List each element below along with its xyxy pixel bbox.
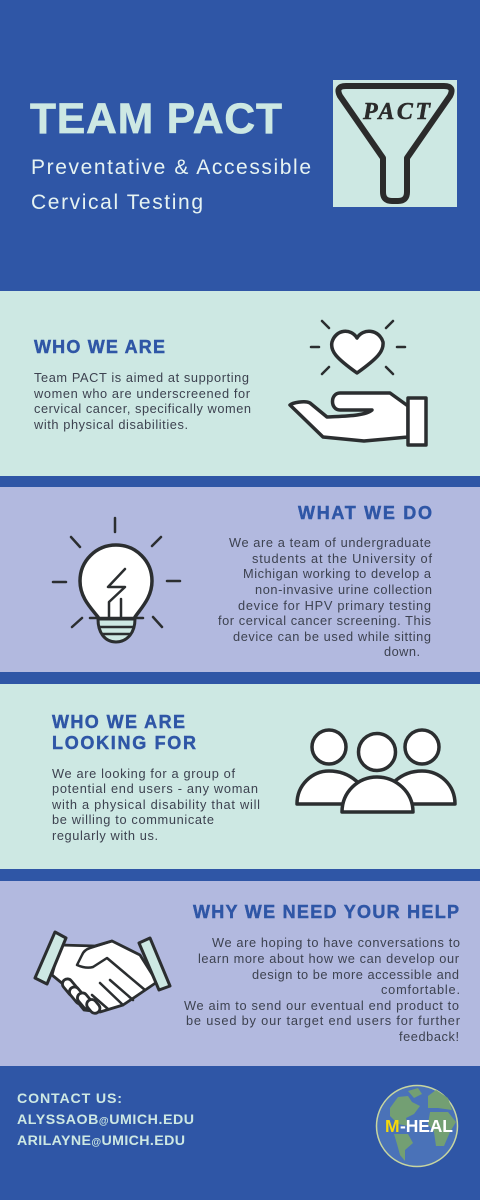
icon: light bulb xyxy=(53,518,180,642)
panel: why we need your help xyxy=(0,881,480,1066)
logo: M-HEAL globe xyxy=(376,1086,458,1166)
text: who we are: Team PACT is aimed at supporting xyxy=(34,370,249,385)
text: why we need your help xyxy=(184,935,461,1044)
text: who we are looking for: We are looking for a group of xyxy=(52,766,235,781)
text: why we need your help: learn more about how we can develop our xyxy=(198,951,460,966)
contact details: CONTACT US: xyxy=(17,1091,122,1107)
text: who we are looking for: potential end users - any woman xyxy=(52,781,258,796)
logo: M-HEAL globe: M xyxy=(385,1116,400,1136)
logo: PACT funnel: PACT xyxy=(362,99,431,125)
heading: who we are looking for: WHO WE ARE xyxy=(52,712,185,732)
heading: why we need your help: WHY WE NEED YOUR HELP xyxy=(193,902,459,922)
text: what we do: device can be used while sitting xyxy=(233,629,431,644)
text: what we do: down. xyxy=(384,644,420,659)
text: why we need your help: feedback! xyxy=(399,1029,459,1044)
icon: hand holding heart xyxy=(290,321,426,445)
text: who we are looking for: be willing to communicate xyxy=(52,812,214,827)
heading: who we are looking for: LOOKING FOR xyxy=(52,733,196,753)
text: what we do: Michigan working to develop a xyxy=(243,566,432,581)
contact details: ALYSSAOB@UMICH.EDU xyxy=(17,1112,194,1128)
text: what we do: device for HPV primary testing xyxy=(238,598,431,613)
panel: who we are looking for xyxy=(0,684,480,869)
logo: PACT funnel xyxy=(333,80,457,207)
contact details xyxy=(17,1091,194,1149)
text: what we do: non-invasive urine collection xyxy=(255,582,432,597)
title: TEAM PACT xyxy=(30,96,282,143)
heading: who we are: WHO WE ARE xyxy=(34,337,165,357)
logo: M-HEAL globe: -HEAL xyxy=(400,1116,453,1136)
text: who we are: cervical cancer, specifically women xyxy=(34,401,251,416)
text: what we do xyxy=(218,535,432,659)
panel: who we are xyxy=(0,291,480,476)
text: who we are xyxy=(33,370,251,432)
text: why we need your help: design to be more accessible and xyxy=(252,967,459,982)
text: why we need your help: We are hoping to have conversations to xyxy=(212,935,460,950)
text: who we are: with physical disabilities. xyxy=(33,417,188,432)
text: why we need your help: We aim to send our eventual end product to xyxy=(184,998,459,1013)
subtitle: Preventative & Accessible xyxy=(31,156,311,179)
subtitle: Cervical Testing xyxy=(31,191,203,214)
subtitle xyxy=(31,156,311,214)
text: who we are looking for: regularly with us. xyxy=(52,828,158,843)
text: why we need your help: be used by our target end users for further xyxy=(186,1013,461,1028)
panel: what we do xyxy=(0,487,480,672)
text: what we do: We are a team of undergraduate xyxy=(229,535,431,550)
text: who we are: women who are underscreened for xyxy=(33,386,251,401)
text: who we are looking for xyxy=(51,766,260,843)
text: what we do: for cervical cancer screening. This xyxy=(218,613,431,628)
icon: group of people xyxy=(297,730,455,812)
contact details: ARILAYNE@UMICH.EDU xyxy=(17,1133,185,1149)
text: who we are looking for: with a physical disability that will xyxy=(51,797,260,812)
text: what we do: students at the University of xyxy=(252,551,432,566)
text: why we need your help: comfortable. xyxy=(381,982,460,997)
heading: what we do: WHAT WE DO xyxy=(298,503,432,523)
heading: who we are looking for xyxy=(52,712,196,753)
icon: handshake xyxy=(35,932,170,1015)
